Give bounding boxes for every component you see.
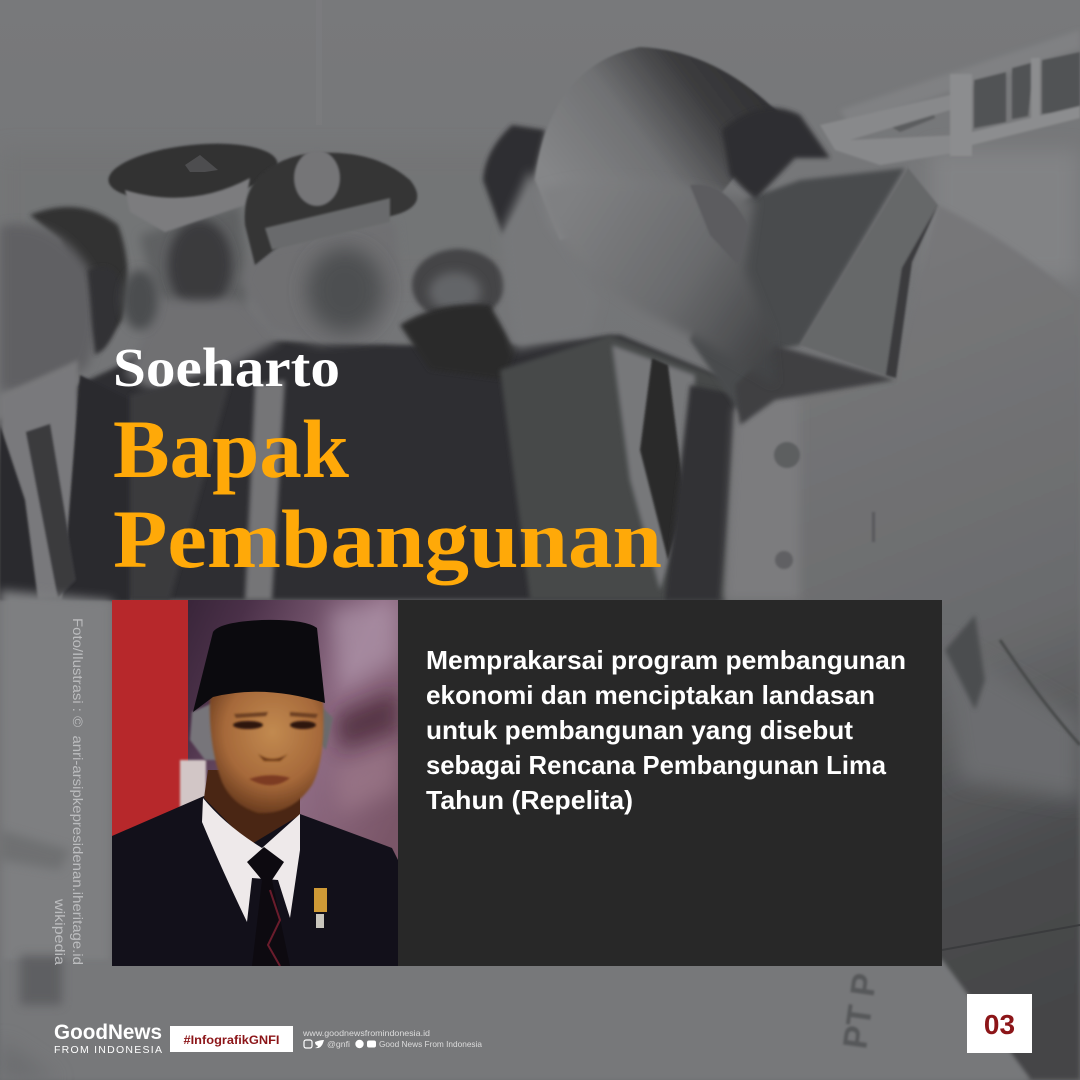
panel description text: untuk pembangunan yang disebut	[426, 715, 853, 745]
portrait: face	[210, 689, 324, 813]
portrait: medal	[314, 888, 327, 928]
portrait: red flag	[112, 600, 188, 840]
panel description text: ekonomi dan menciptakan landasan	[426, 680, 875, 710]
page number badge	[967, 994, 1032, 1053]
handle: Good News From Indonesia: Good News From Indonesia	[379, 1039, 482, 1049]
footer logo: GoodNews from Indonesia: GoodNews	[54, 1021, 162, 1044]
photo credit: wikipedia	[52, 898, 67, 966]
footer logo: GoodNews from Indonesia: FROM INDONESIA	[54, 1044, 162, 1056]
background: main figure neck and collar	[690, 168, 938, 425]
text panel	[398, 600, 942, 966]
title: Bapak: Bapak	[113, 403, 350, 495]
panel description text: Tahun (Repelita)	[426, 785, 633, 815]
icon: youtube	[367, 1040, 376, 1048]
page number badge: 03	[984, 1009, 1015, 1040]
icon: twitter	[315, 1040, 324, 1048]
icon: facebook	[355, 1040, 364, 1048]
icon: instagram	[304, 1040, 312, 1048]
background: officer centre	[130, 150, 417, 600]
panel description text	[426, 645, 906, 815]
portrait: black peci cap	[193, 620, 325, 712]
portrait: nose and mouth	[249, 754, 290, 785]
portrait: neck	[204, 770, 300, 845]
photo credit: Foto/Ilustrasi : © anri-arsipkepresidenan.iheritage.id	[70, 618, 85, 965]
background: table paper	[0, 590, 1030, 1080]
background: officer left	[106, 136, 280, 400]
portrait: eyes	[233, 712, 318, 729]
portrait: tie	[247, 847, 290, 966]
title: Soeharto: Soeharto	[113, 337, 340, 398]
panel description text: sebagai Rencana Pembangunan Lima	[426, 750, 887, 780]
handle: gnfi: @gnfi	[327, 1039, 350, 1049]
footer hashtag badge	[170, 1026, 293, 1052]
portrait: hair sides	[190, 702, 218, 760]
footer website and social handles: www.goodnewsfromindonesia.id	[302, 1028, 430, 1038]
background: roof truss	[820, 30, 1080, 165]
background: left man	[0, 207, 130, 600]
title: Pembangunan: Pembangunan	[113, 493, 662, 585]
background: crowd dark base	[0, 335, 740, 600]
portrait photo of Soeharto	[112, 600, 398, 966]
portrait: suit	[112, 796, 398, 966]
panel description text: Memprakarsai program pembangunan	[426, 645, 906, 675]
background: main figure head	[535, 47, 830, 385]
background: main figure jacket	[725, 205, 1080, 1080]
background: centre figures	[400, 125, 740, 600]
footer website and social handles	[302, 1028, 482, 1049]
portrait: shirt collar	[202, 798, 300, 922]
portrait: backdrop	[188, 600, 398, 860]
footer logo: GoodNews from Indonesia	[54, 1021, 162, 1056]
footer hashtag badge: #InfografikGNFI	[184, 1033, 280, 1047]
photo credit	[52, 618, 85, 966]
background: printed letters on paper: PT P	[836, 971, 884, 1051]
